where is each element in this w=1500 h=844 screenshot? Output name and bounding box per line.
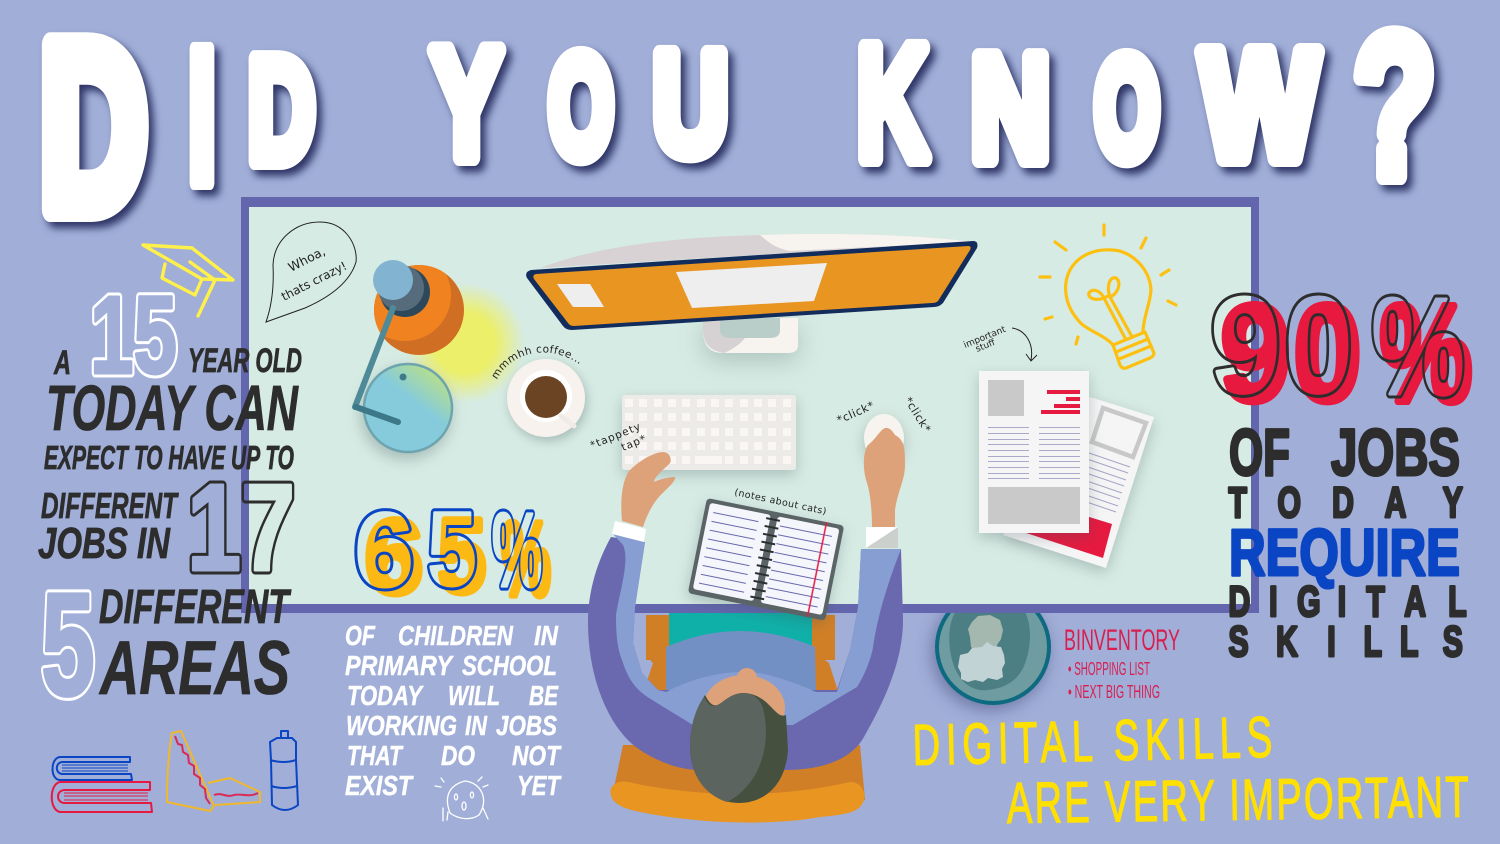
text: of children in primary school: BE [529, 680, 559, 711]
speech bubble: whoa, thats crazy [266, 222, 356, 322]
mouse and click labels: *click* [901, 395, 934, 435]
stat: 90 percent [1211, 292, 1472, 406]
torso [666, 613, 816, 692]
person: arms and shoulders [588, 533, 903, 770]
icon: graduation cap [143, 245, 233, 316]
lamp [355, 249, 525, 452]
left stat text: 15 year old, 17 jobs, 5 areas: 17 [187, 460, 295, 597]
left stat text: 15 year old, 17 jobs, 5 areas: DIFFERENT [41, 485, 179, 526]
text: digital skills are very important: DIGITAL SKILLS [912, 706, 1273, 778]
text: of jobs today require digital skills: SKILLS [1228, 617, 1463, 665]
mouse and click labels [835, 395, 934, 462]
text: of jobs today require digital skills: TODAY [1228, 478, 1463, 526]
title: did you know [40, 0, 1436, 260]
stat: 90 percent: 9 [1211, 269, 1280, 421]
text: of children in primary school [345, 620, 562, 801]
text: of children in primary school: CHILDREN [398, 620, 514, 651]
left stat text: 15 year old, 17 jobs, 5 areas: TODAY CAN [46, 372, 299, 444]
icon: surprised face [435, 777, 488, 821]
text: of children in primary school: TODAY [347, 680, 424, 711]
text: of children in primary school: YET [517, 770, 562, 801]
notebook [688, 498, 844, 621]
stat: 90 percent: 0 [1294, 277, 1361, 429]
left stat text: 15 year old, 17 jobs, 5 areas: EXPECT TO HAVE UP TO [44, 439, 294, 476]
icon: sandwich [167, 731, 260, 811]
left stat text: 15 year old, 17 jobs, 5 areas: DIFFERENT [99, 581, 292, 634]
title: did you know: N [971, 26, 1050, 191]
text: of children in primary school: IN [465, 710, 488, 741]
title: did you know: O [1095, 29, 1159, 188]
text: of jobs today require digital skills: OF [1229, 415, 1290, 489]
left stat text: 15 year old, 17 jobs, 5 areas: 15 [90, 274, 177, 397]
icon: stacked books [52, 757, 152, 812]
chair back and arm rests [610, 615, 865, 823]
right hand [864, 428, 905, 548]
text: of children in primary school: WILL [448, 680, 500, 711]
keyboard: *tappety [589, 420, 643, 452]
desk panel [241, 197, 1259, 613]
mouse and click labels: *click* [835, 399, 877, 427]
speech bubble: whoa, thats crazy: Whoa, [286, 243, 328, 275]
head [690, 668, 788, 803]
text: binventory list [1064, 624, 1180, 702]
left stat text: 15 year old, 17 jobs, 5 areas: A [53, 344, 71, 382]
note: important stuff with arrow [962, 325, 1037, 361]
stat: 65 percent: % [492, 492, 542, 609]
stat: 90 percent: 9 [1221, 277, 1290, 429]
stat: 65 percent [354, 508, 552, 600]
text: of jobs today require digital skills: DIGITAL [1228, 577, 1467, 625]
waste bin [937, 591, 1049, 703]
stat: 65 percent: 6 [355, 492, 413, 609]
stat: 65 percent: % [501, 501, 551, 618]
left stat text: 15 year old, 17 jobs, 5 areas: AREAS [99, 626, 290, 711]
text: digital skills are very important: ARE VERY IMPORTANT [1006, 766, 1469, 836]
stat: 90 percent: % [1372, 270, 1464, 424]
note: notes about cats: (notes about cats) [733, 487, 828, 518]
left hand [612, 452, 675, 542]
text: of children in primary school: THAT [347, 740, 404, 771]
text: of children in primary school: IN [534, 620, 559, 651]
icon: water bottle [270, 731, 298, 810]
text: of children in primary school: OF [345, 620, 376, 651]
title: did you know: U [653, 23, 728, 184]
keyboard: tap* [620, 433, 649, 454]
coffee cup [492, 345, 592, 446]
text: binventory list: BINVENTORY [1064, 624, 1180, 657]
speech bubble: whoa, thats crazy: thats crazy! [279, 259, 349, 304]
keyboard [589, 395, 796, 470]
title: did you know: W [1201, 19, 1319, 191]
document: back page [1003, 397, 1154, 568]
title: did you know: D [40, 0, 147, 260]
document: front page [979, 371, 1089, 533]
text: binventory list: • NEXT BIG THING [1068, 682, 1160, 702]
stat: 65 percent: 6 [365, 499, 423, 616]
text: digital skills are very important [912, 706, 1469, 836]
text: of children in primary school: WORKING [346, 710, 457, 741]
text: of jobs today require digital skills [1228, 415, 1467, 665]
text: binventory list: • SHOPPING LIST [1068, 659, 1150, 679]
title: did you know: D [248, 28, 315, 193]
text: of children in primary school: NOT [512, 740, 562, 771]
title: did you know: O [549, 27, 613, 186]
note: important stuff with arrow: important [962, 325, 1008, 351]
text: of children in primary school: PRIMARY [345, 650, 454, 681]
monitor [526, 234, 978, 353]
note: important stuff with arrow: stuff [974, 338, 998, 355]
stat: 65 percent: 5 [428, 491, 476, 608]
stat: 90 percent: 0 [1285, 269, 1352, 421]
icon: light bulb [1040, 225, 1176, 368]
coffee cup: mmmhh coffee... [492, 345, 580, 379]
text: of children in primary school: DO [441, 740, 475, 771]
title: did you know: I [186, 7, 218, 225]
left stat text: 15 year old, 17 jobs, 5 areas [38, 245, 302, 727]
left stat text: 15 year old, 17 jobs, 5 areas: YEAR OLD [188, 342, 302, 380]
text: of children in primary school: JOBS [496, 710, 557, 741]
stat: 65 percent: 5 [438, 498, 486, 615]
title: did you know: K [857, 13, 928, 192]
title: did you know: Y [431, 17, 502, 190]
left stat text: 15 year old, 17 jobs, 5 areas: JOBS IN [38, 519, 171, 568]
left stat text: 15 year old, 17 jobs, 5 areas: 5 [41, 563, 95, 727]
text: of children in primary school: SCHOOL [462, 650, 557, 681]
stat: 90 percent: % [1380, 277, 1472, 431]
text: of children in primary school: EXIST [345, 770, 414, 801]
